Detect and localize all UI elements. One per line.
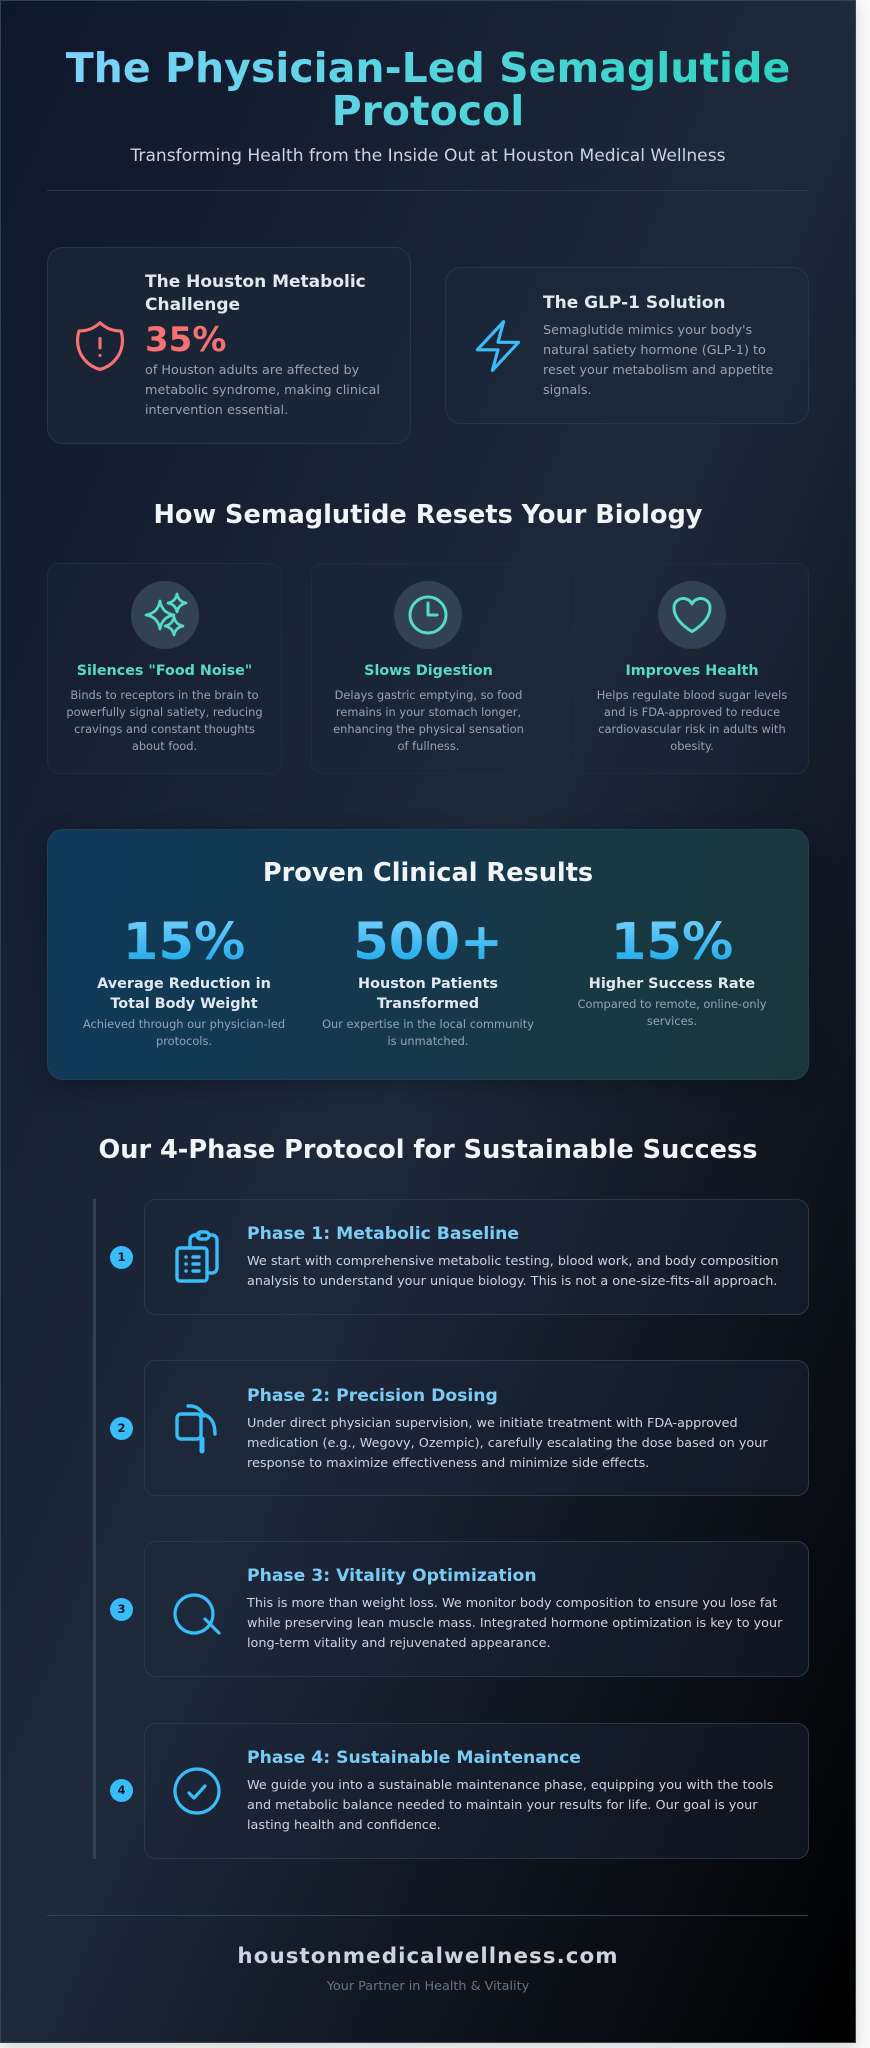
heading: The Houston Metabolic xyxy=(145,272,366,292)
card text xyxy=(333,688,524,753)
detail xyxy=(83,1017,285,1048)
step number 1 xyxy=(110,1246,133,1269)
card text: of fullness. xyxy=(398,739,459,753)
step number 2: 2 xyxy=(117,1421,126,1435)
phase text: while preserving lean muscle mass. Integrated hormone optimization is key to your xyxy=(247,1616,782,1631)
icon: magnifier xyxy=(173,1593,221,1635)
card text: about food. xyxy=(132,739,197,753)
panel: phase 3 xyxy=(144,1541,809,1677)
panel: proven clinical results xyxy=(47,829,809,1080)
phase text xyxy=(246,1596,782,1651)
card text: powerfully signal satiety, reducing xyxy=(66,705,263,719)
heading: The GLP-1 Solution xyxy=(543,293,725,313)
icon: syringe shape xyxy=(175,1404,217,1454)
detail xyxy=(578,997,766,1028)
phase text: We guide you into a sustainable maintenance phase, equipping you with the tools xyxy=(247,1778,773,1793)
number xyxy=(48,912,320,972)
card title: Silences "Food Noise" xyxy=(77,663,252,679)
detail: Achieved through our physician-led xyxy=(83,1017,285,1031)
panel: Houston metabolic challenge xyxy=(47,247,411,444)
label xyxy=(97,976,271,1012)
description: natural satiety hormone (GLP-1) to xyxy=(543,343,766,358)
phase text: This is more than weight loss. We monitor body composition to ensure you lose fat xyxy=(247,1596,777,1611)
card text: cravings and constant thoughts xyxy=(74,722,255,736)
stat: 500+ patients xyxy=(322,912,534,1048)
label: Average Reduction in xyxy=(97,976,271,992)
panel: phase 2 xyxy=(144,1360,809,1496)
step number 4: 4 xyxy=(117,1783,126,1797)
card text: obesity. xyxy=(670,739,714,753)
icon: shield xyxy=(76,321,124,371)
stat: 15% weight reduction xyxy=(83,912,285,1048)
detail: is unmatched. xyxy=(387,1034,469,1048)
title: The Physician-Led Semaglutide xyxy=(66,44,790,92)
phase title: Phase 1: Metabolic Baseline xyxy=(247,1224,519,1244)
detail xyxy=(322,1017,534,1048)
description: metabolic syndrome, making clinical xyxy=(145,383,380,398)
panel: GLP-1 solution xyxy=(445,267,809,424)
footer tagline: Your Partner in Health & Vitality xyxy=(327,1979,529,1994)
description: reset your metabolism and appetite xyxy=(543,363,773,378)
description: signals. xyxy=(543,383,592,398)
number: 15% xyxy=(611,912,733,972)
card text: cardiovascular risk in adults with xyxy=(598,722,786,736)
panel: silences food noise xyxy=(47,563,282,774)
heading: Proven Clinical Results xyxy=(263,858,593,888)
card text: remains in your stomach longer, xyxy=(336,705,521,719)
card title: Improves Health xyxy=(625,663,759,679)
heading: Challenge xyxy=(145,295,240,315)
label: Total Body Weight xyxy=(110,996,258,1012)
phase text: medication (e.g., Wegovy, Ozempic), carefully escalating the dose based on your xyxy=(247,1436,768,1451)
phase text xyxy=(247,1254,778,1289)
label: Transformed xyxy=(377,996,479,1012)
title xyxy=(47,47,809,139)
label: Higher Success Rate xyxy=(589,976,755,992)
phase title: Phase 4: Sustainable Maintenance xyxy=(247,1748,581,1768)
description xyxy=(145,363,380,418)
detail: protocols. xyxy=(156,1034,212,1048)
timeline line xyxy=(93,1199,96,1859)
step number 3 xyxy=(110,1598,133,1621)
phase text xyxy=(247,1778,773,1833)
step number 4 xyxy=(110,1779,133,1802)
phase text: lasting health and confidence. xyxy=(247,1818,441,1833)
description xyxy=(543,323,773,398)
phase text xyxy=(247,1416,768,1471)
card text: enhancing the physical sensation xyxy=(333,722,524,736)
stat: 15% success rate xyxy=(578,912,766,1028)
card text: Helps regulate blood sugar levels xyxy=(597,688,787,702)
phase title: Phase 2: Precision Dosing xyxy=(247,1386,498,1406)
panel: phase 4 xyxy=(144,1723,809,1859)
subtitle: Transforming Health from the Inside Out at Houston Medical Wellness xyxy=(130,146,726,166)
heading: how semaglutide resets your biology: How Semaglutide Resets Your Biology xyxy=(154,500,702,530)
card text xyxy=(66,688,263,753)
step number 1: 1 xyxy=(117,1250,126,1264)
number: 15% xyxy=(123,912,245,972)
phase text: analysis to understand your unique biology. This is not a one-size-fits-all approach. xyxy=(247,1274,777,1289)
description: of Houston adults are affected by xyxy=(145,363,359,378)
card title: Slows Digestion xyxy=(364,663,493,679)
step number 2 xyxy=(110,1417,133,1440)
number xyxy=(536,912,808,972)
phase text: We start with comprehensive metabolic testing, blood work, and body composition xyxy=(247,1254,778,1269)
icon: clock xyxy=(394,581,462,649)
card text: Binds to receptors in the brain to xyxy=(70,688,259,702)
phase text: response to maximize effectiveness and minimize side effects. xyxy=(247,1456,649,1471)
card text: and is FDA-approved to reduce xyxy=(604,705,780,719)
label xyxy=(358,976,498,1012)
detail: services. xyxy=(647,1014,697,1028)
number: 500+ xyxy=(353,912,503,972)
description: Semaglutide mimics your body's xyxy=(543,323,752,338)
heading xyxy=(145,272,366,315)
phase title: Phase 3: Vitality Optimization xyxy=(247,1566,537,1586)
panel: improves health xyxy=(575,563,809,774)
label: Houston Patients xyxy=(358,976,498,992)
icon: heart xyxy=(658,581,726,649)
phase text: long-term vitality and rejuvenated appearance. xyxy=(247,1636,551,1651)
card text xyxy=(597,688,787,753)
number xyxy=(292,912,564,972)
phase text: and metabolic balance needed to maintain your results for life. Our goal is your xyxy=(247,1798,758,1813)
title: Protocol xyxy=(332,87,524,135)
step number 3: 3 xyxy=(117,1602,126,1616)
description: intervention essential. xyxy=(145,403,288,418)
panel: slows digestion xyxy=(311,563,546,774)
detail: Our expertise in the local community xyxy=(322,1017,534,1031)
icon: check circle xyxy=(173,1767,221,1815)
icon: lightning bolt xyxy=(476,320,520,372)
heading: 4-phase protocol: Our 4-Phase Protocol for Sustainable Success xyxy=(98,1135,758,1165)
footer website: houstonmedicalwellness.com xyxy=(237,1944,619,1969)
phase text: Under direct physician supervision, we initiate treatment with FDA-approved xyxy=(247,1416,738,1431)
statistic: 35%: 35% xyxy=(145,320,226,360)
panel: phase 1 xyxy=(144,1199,809,1315)
card text: Delays gastric emptying, so food xyxy=(335,688,522,702)
icon: clipboard xyxy=(175,1230,219,1283)
icon: sparkles xyxy=(131,581,199,649)
detail: Compared to remote, online-only xyxy=(578,997,766,1011)
